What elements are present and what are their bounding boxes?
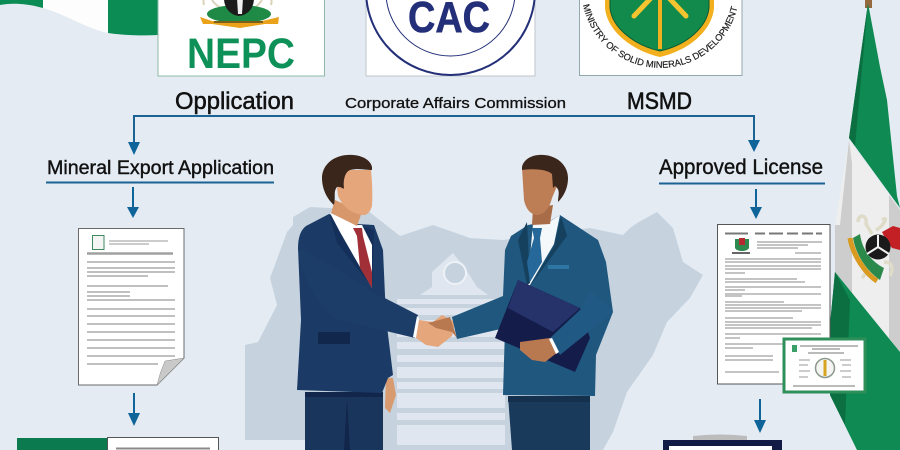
certificate card: [784, 339, 865, 392]
arrow: license to document: [750, 189, 762, 219]
top-left Nigerian flag: [0, 0, 158, 35]
NEPC wordmark: NEPC: [187, 30, 295, 78]
cuff: [549, 338, 559, 354]
right businessman: [452, 155, 613, 450]
sleeve over folder: [550, 290, 613, 355]
trousers: [305, 392, 383, 450]
hair: [322, 155, 372, 205]
hair: [522, 155, 568, 202]
left businessman: [297, 155, 419, 450]
trousers: [508, 396, 590, 450]
cuff: [413, 316, 419, 338]
label: Mineral Export Application: Mineral Export Application: [47, 158, 274, 179]
tie: [527, 228, 542, 282]
folder: [495, 280, 590, 372]
icon: license crest: [732, 238, 750, 253]
heading: Opplication: Opplication: [175, 88, 294, 115]
shirt and collar: [330, 213, 372, 288]
icon: CAC seal rings: [366, 0, 535, 75]
icon: flag coat of arms: [850, 216, 900, 281]
connector arrow from top row to both branches: [128, 116, 760, 155]
handshake: [416, 315, 457, 347]
arrow: application to document: [127, 187, 139, 218]
face: [337, 170, 372, 215]
arrow: license to bottom frame: [754, 399, 766, 433]
MSMD logo card: [579, 0, 742, 76]
arrow: application document to export permit: [128, 393, 140, 426]
framed certificate, cropped: [663, 434, 782, 450]
face: [522, 168, 557, 215]
heading: MSMD: MSMD: [627, 88, 692, 115]
icon: NEPC coat of arms: [200, 0, 279, 28]
background map of Nigeria with building: [245, 207, 703, 450]
right flag on pole: [830, 0, 900, 450]
approved license document: [718, 224, 830, 384]
pocket: [548, 265, 569, 269]
jacket: [297, 214, 393, 393]
heading: Corporate Affairs Commission: Corporate Affairs Commission: [345, 95, 566, 112]
tie: [353, 228, 372, 288]
CAC logo card: [366, 0, 535, 76]
NEPC logo card: [158, 0, 324, 78]
pocket: [318, 332, 350, 344]
hand at side: [385, 378, 396, 413]
shirt and collar: [527, 215, 560, 290]
jacket: [452, 215, 613, 396]
label: Approved License: Approved License: [659, 156, 823, 179]
hand holding folder: [520, 338, 558, 362]
neck: [532, 205, 553, 225]
icon: ministry shield: [605, 0, 714, 57]
ministry curved name: MINISTRY OF SOLID MINERALS DEVELOPMENT: [583, 4, 737, 68]
neck: [331, 200, 362, 226]
application document: [78, 228, 184, 385]
export permit with green folder, cropped: [17, 438, 218, 450]
lapels: [518, 216, 567, 286]
